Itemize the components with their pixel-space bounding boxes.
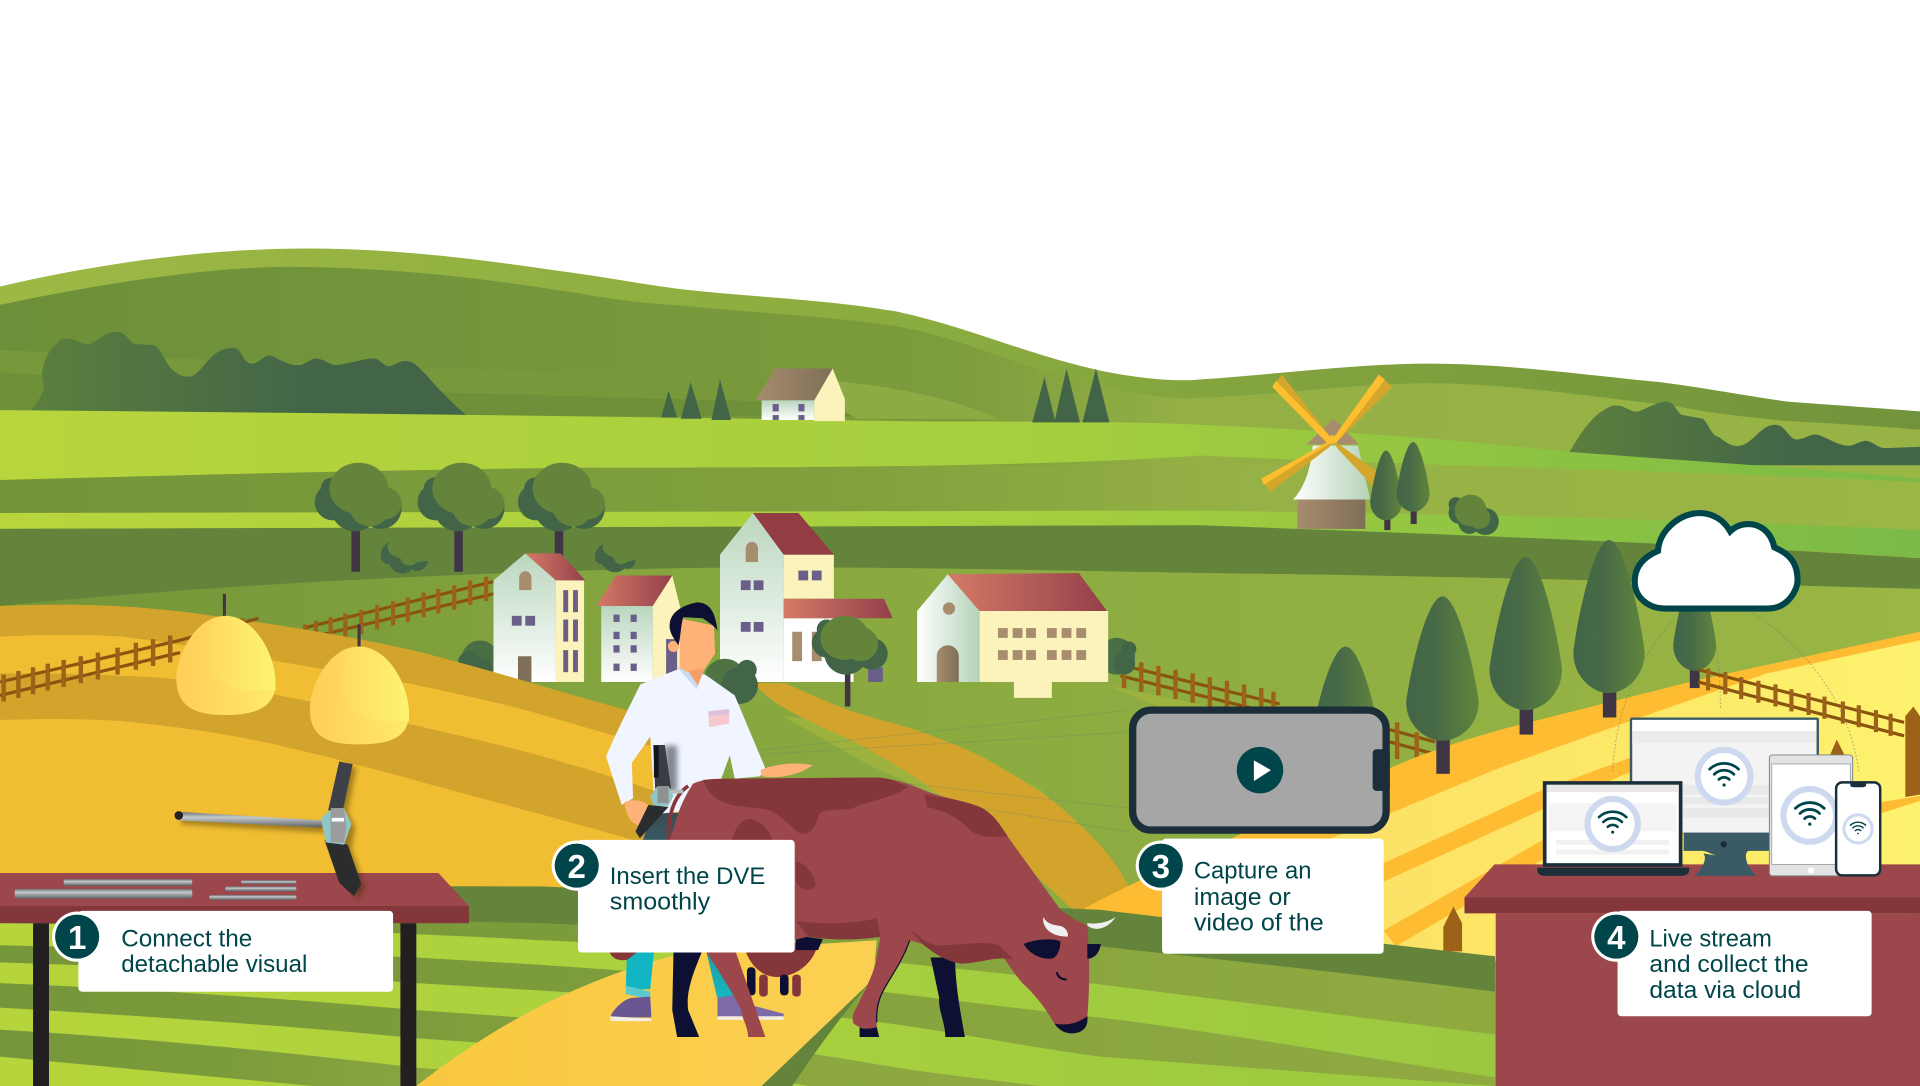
cow: [610, 777, 1116, 1037]
device: tablet: [1769, 755, 1853, 876]
detachable visual device on the table: [174, 762, 365, 900]
far house with conifers: [661, 369, 845, 421]
caption 1: Connect the: [121, 925, 252, 952]
right mountain range: [1570, 401, 1920, 475]
dirt road: [416, 940, 877, 1086]
field: mid-ground: [0, 465, 1920, 612]
fields: stripes across the foreground: [0, 885, 1495, 1086]
haystack 1: [176, 594, 276, 715]
bushes beside the houses: [458, 638, 1136, 681]
left mountain range: [28, 332, 468, 416]
caption 3: [1136, 839, 1384, 954]
house 3: [720, 513, 893, 682]
large fence post: [1905, 706, 1920, 797]
table 4: [1464, 864, 1920, 1086]
device: monitor: [1630, 717, 1819, 876]
caption 4: and collect the: [1649, 951, 1809, 978]
windmill: [1261, 375, 1392, 529]
fence: right field: [1698, 668, 1904, 736]
haystack 2: [310, 624, 409, 744]
caption 2: smoothly: [610, 889, 711, 916]
cypress row: [1314, 540, 1716, 774]
person in white coat: [606, 602, 813, 1021]
fence: back left: [304, 577, 493, 649]
house 1: [493, 553, 585, 682]
network lines: [666, 612, 1859, 833]
caption 3: Capture an: [1194, 857, 1311, 884]
conifers on the far hill: [1032, 369, 1109, 422]
caption 4: Live stream: [1649, 925, 1772, 952]
dark wedge beside the road: [762, 979, 873, 1086]
caption 2: Insert the DVE: [610, 863, 765, 890]
detachable visual device in the person's hand: [636, 745, 683, 838]
crescent shrubs: [381, 541, 636, 573]
field: ochre band behind the houses: [754, 683, 1133, 912]
caption 1: detachable visual: [121, 951, 307, 978]
landscape: distant hills: [0, 249, 1920, 514]
rods on the table: [15, 879, 296, 900]
field: second bright band: [0, 511, 1920, 558]
table 1: [0, 873, 469, 1086]
caption 3: video of the: [1194, 910, 1324, 937]
field: subtle lighter strips: [784, 686, 1371, 869]
bush behind the person: [704, 659, 758, 705]
fence: front left: [0, 618, 258, 702]
caption 4: data via cloud: [1649, 977, 1801, 1004]
house 4: [917, 573, 1108, 698]
cloud icon: [1635, 513, 1798, 609]
caption 2: [552, 840, 795, 953]
caption 1: 1: [68, 920, 86, 957]
fence: behind the phone: [1120, 659, 1435, 759]
small fence posts in the right field: [1443, 740, 1845, 951]
tree beside house 3: [812, 616, 888, 706]
field: dark band: [0, 525, 1920, 606]
caption 3: image or: [1194, 884, 1291, 911]
caption 4: [1591, 911, 1872, 1016]
caption 3: 3: [1152, 849, 1170, 886]
device: smartphone: [1836, 782, 1880, 875]
three round trees: [315, 463, 605, 572]
shrub near the windmill: [1449, 495, 1499, 535]
field: bright upper band: [0, 410, 1920, 482]
field: main meadow: [0, 567, 1920, 1086]
cypresses beside the windmill: [1370, 442, 1430, 530]
device: large phone with video: [1133, 710, 1390, 830]
caption 2: 2: [568, 849, 586, 886]
field: orange and yellow stripes on the right: [1078, 632, 1920, 961]
field: yellow hill on the left: [0, 605, 735, 888]
house 2: [596, 575, 683, 682]
caption 1: [52, 911, 393, 992]
caption 4: 4: [1607, 920, 1626, 957]
device: laptop: [1537, 781, 1689, 876]
